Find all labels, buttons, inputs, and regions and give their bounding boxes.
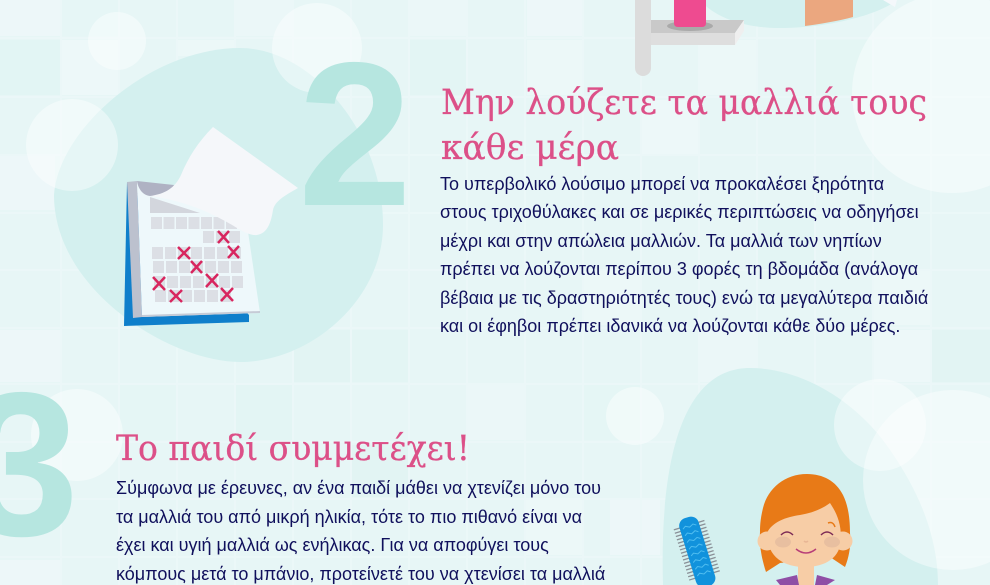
- text block: section 2: βέβαια με τις δραστηριότητές τους) ενώ τα μεγαλύτερα παιδιά: [440, 288, 928, 308]
- text block: section 3: [116, 478, 605, 584]
- illustration: shelf and bottle: [635, 0, 897, 76]
- text block: section 2: [440, 174, 928, 336]
- text block: section 2: πρέπει να λούζονται περίπου 3 φορές τη βδομάδα (ανάλογα: [440, 259, 918, 279]
- text block: section 3: Σύμφωνα με έρευνες, αν ένα παιδί μάθει να χτενίζει μόνο του: [116, 478, 601, 498]
- text block: section 3: τα μαλλιά του από μικρή ηλικία, τότε το πιο πιθανό είναι να: [116, 507, 582, 527]
- blob: behind girl: [663, 368, 938, 585]
- number 2: 2: [298, 20, 412, 249]
- heading: section 3: Το παιδί συμμετέχει!: [116, 429, 470, 469]
- icon: calendar: [124, 127, 298, 326]
- illustration: girl: [758, 474, 852, 585]
- text block: section 3: έχει και υγιή μαλλιά ως ενήλικας. Για να αποφύγει τους: [116, 535, 549, 555]
- text block: section 2: και οι έφηβοι πρέπει ιδανικά να λούζονται κάθε δύο μέρες.: [440, 316, 900, 336]
- text block: section 2: μέχρι και στην απώλεια μαλλιών. Τα μαλλιά των νηπίων: [440, 231, 882, 251]
- text block: section 2: στους τριχοθύλακες και σε μερικές περιπτώσεις να οδηγήσει: [440, 202, 919, 222]
- heading: section 2: [441, 83, 927, 168]
- heading: section 2: κάθε μέρα: [441, 128, 619, 168]
- blob: behind calendar: [54, 48, 383, 362]
- text block: section 2: Το υπερβολικό λούσιμο μπορεί να προκαλέσει ξηρότητα: [440, 174, 884, 194]
- text block: section 3: κόμπους μετά το μπάνιο, προτείνετέ του να χτενίσει τα μαλλιά: [116, 564, 605, 584]
- heading: section 2: Μην λούζετε τα μαλλιά τους: [441, 83, 927, 123]
- icon: hairbrush: [671, 513, 723, 585]
